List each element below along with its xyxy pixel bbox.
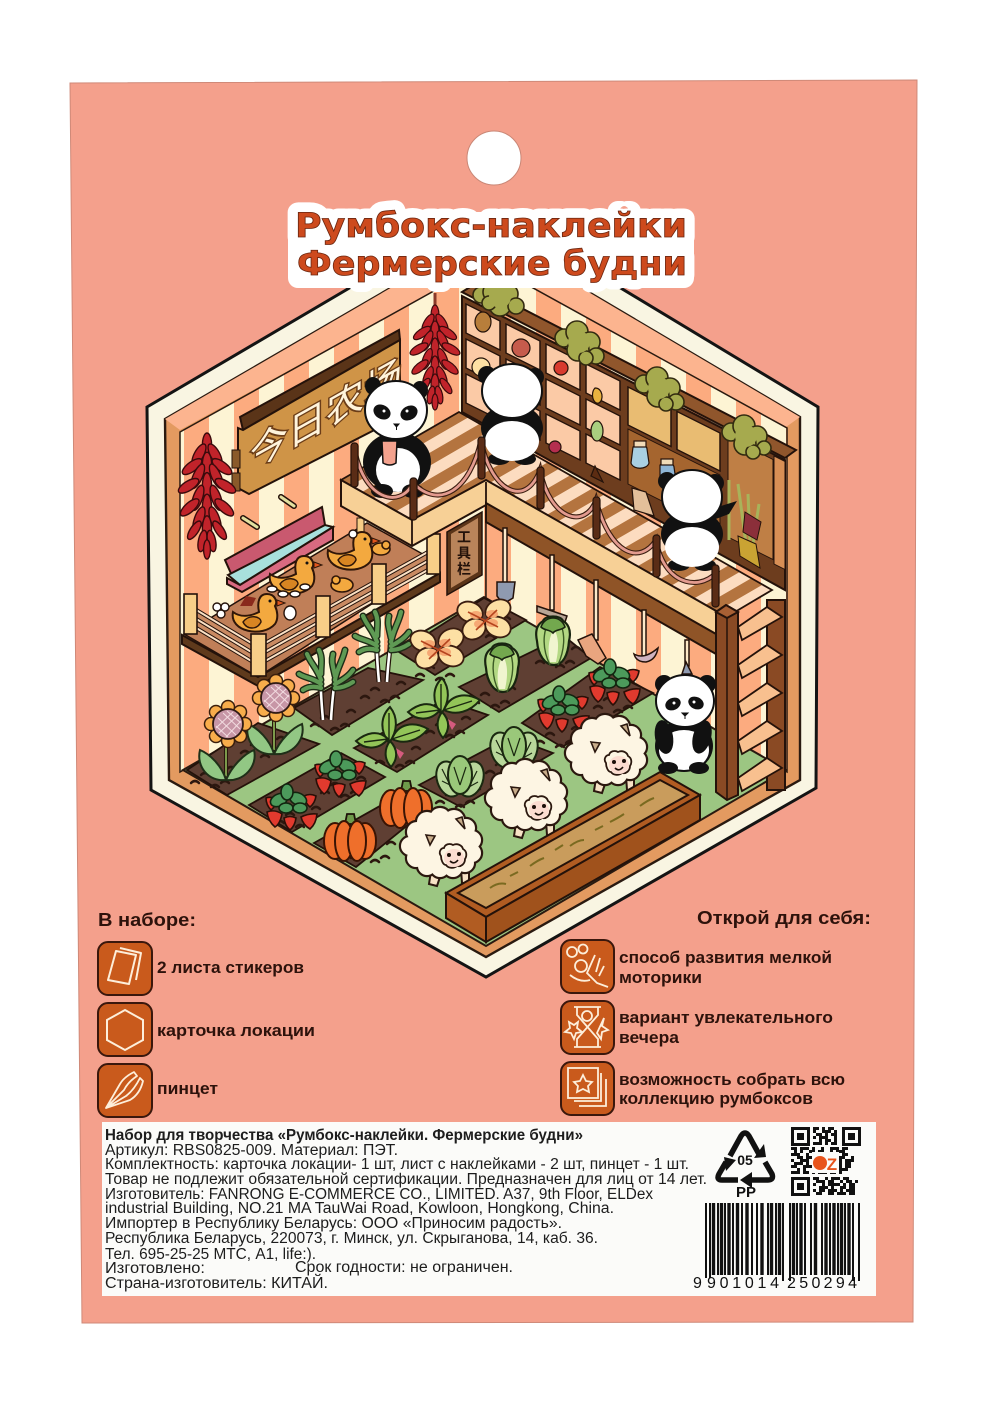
plants: flat flowers bbox=[407, 595, 514, 673]
barcode digits: 250294 bbox=[787, 1275, 857, 1292]
hen 1 bbox=[270, 556, 322, 594]
icon: sticker sheets bbox=[98, 942, 152, 995]
text: fine motor skills: способ развития мелкой bbox=[619, 949, 832, 967]
plants: sunflowers bbox=[199, 674, 303, 780]
text: tweezers: пинцет bbox=[157, 1080, 218, 1098]
floor bbox=[183, 597, 786, 946]
plants: lettuce bbox=[432, 727, 542, 800]
right wall bbox=[486, 262, 787, 772]
label text: Товар не подлежит обязательной сертификации. Предназначен для лиц от 14 лет. bbox=[105, 1171, 707, 1188]
barcode digits: 9 bbox=[693, 1275, 702, 1292]
heading: discover: Открой для себя: bbox=[697, 908, 871, 928]
label text: industrial Building, NO.21 MA TauWai Road, Kowloon, Hongkong, China. bbox=[105, 1200, 614, 1217]
panel: product label bbox=[102, 1122, 876, 1296]
label text: Изготовлено: bbox=[105, 1260, 205, 1277]
plants: leeks bbox=[299, 612, 409, 720]
chili string bbox=[434, 293, 436, 315]
label text: Страна-изготовитель: КИТАЙ. bbox=[105, 1274, 328, 1292]
text: fine motor skills: моторики bbox=[619, 969, 702, 987]
title bbox=[288, 206, 694, 288]
tool signboard: 具 bbox=[457, 545, 471, 561]
icon: tweezers bbox=[98, 1064, 152, 1117]
plants: pumpkins bbox=[324, 781, 432, 861]
icon: recycling 05 PP: 05 bbox=[737, 1152, 753, 1168]
QR code: Z bbox=[827, 1155, 837, 1174]
hen 3 with comb bbox=[233, 594, 285, 632]
panel: in the set bbox=[98, 910, 315, 1117]
soil texture bbox=[191, 617, 638, 862]
chili bunch left bbox=[176, 433, 238, 559]
dried plants bbox=[729, 480, 761, 568]
hanging tools bbox=[497, 528, 692, 674]
barcode digits: 901014 bbox=[707, 1275, 779, 1292]
text: collection: возможность собрать всю bbox=[619, 1071, 845, 1089]
label text: Набор для творчества «Румбокс-наклейки. Фермерские будни» bbox=[105, 1127, 583, 1144]
text: exciting evening bbox=[619, 1009, 833, 1047]
chili bunch right bbox=[408, 305, 462, 410]
feeder bbox=[225, 507, 333, 592]
ladder bbox=[738, 600, 785, 791]
panel: isometric farm room bbox=[147, 232, 818, 977]
label text bbox=[105, 1127, 707, 1292]
label text: Республика Беларусь, 220073, г. Минск, ул. Скрыганова, 14, каб. 36. bbox=[105, 1230, 598, 1247]
sign: farm board bbox=[232, 330, 402, 494]
icon: recycling 05 PP: PP bbox=[736, 1184, 756, 1201]
text: exciting evening: вариант увлекательного bbox=[619, 1009, 833, 1027]
vegetable beds bbox=[187, 598, 653, 867]
sign: farm board: 今日农场 bbox=[250, 350, 402, 478]
title: Фермерские будни bbox=[297, 244, 687, 284]
wooden post bbox=[716, 605, 738, 800]
moss bush 4 bbox=[722, 415, 771, 459]
plants: beet bbox=[356, 678, 480, 767]
chicks bbox=[331, 541, 390, 592]
moss bush 1 bbox=[473, 282, 524, 316]
text: collection: коллекцию румбоксов bbox=[619, 1090, 813, 1108]
plants: strawberries front bbox=[266, 751, 366, 830]
hen 2 bbox=[328, 532, 380, 570]
wall tools handles bbox=[243, 497, 294, 527]
panda back shelf left bbox=[478, 364, 544, 465]
text: exciting evening: вечера bbox=[619, 1029, 680, 1047]
shelf contents bbox=[472, 312, 676, 516]
plants: strawberries back bbox=[538, 659, 640, 732]
panel: discover bbox=[561, 908, 871, 1115]
text: location card: карточка локации bbox=[157, 1022, 315, 1040]
label text: Импортер в Республику Беларусь: ООО «Приносим радость». bbox=[105, 1215, 562, 1232]
icon: gears and hand bbox=[561, 940, 614, 993]
heading: in the set: В наборе: bbox=[98, 910, 196, 930]
hay trough bbox=[446, 772, 700, 942]
moss bush 2 bbox=[555, 321, 604, 365]
wall tools bbox=[243, 497, 294, 527]
tool signboard bbox=[447, 512, 482, 595]
eggs bbox=[213, 530, 357, 620]
barcode bbox=[693, 1203, 859, 1292]
panda front standing bbox=[652, 675, 716, 774]
panda back shelf right bbox=[658, 470, 737, 571]
title: Фермерские будни bbox=[297, 244, 687, 284]
coop platform bbox=[182, 518, 440, 686]
fence bbox=[184, 534, 440, 676]
shelf unit bbox=[462, 284, 796, 590]
label text: Тел. 695-25-25 МТС, A1, life:). bbox=[105, 1246, 316, 1263]
hexagon frame bbox=[147, 232, 818, 977]
icon: location card bbox=[98, 1003, 152, 1056]
icon: hourglass bbox=[561, 1001, 614, 1054]
label text: Изготовитель: FANRONG E-COMMERCE CO., LIMITED. A37, 9th Floor, ELDex bbox=[105, 1186, 653, 1203]
text: 2 sheets: 2 листа стикеров bbox=[157, 959, 304, 977]
QR code bbox=[791, 1128, 860, 1194]
label text: Комплектность: карточка локации- 1 шт, лист с наклейками - 2 шт, пинцет - 1 шт. bbox=[105, 1156, 689, 1173]
barcode digits bbox=[693, 1275, 857, 1292]
left wall bbox=[180, 262, 486, 772]
title: Румбокс-наклейки bbox=[295, 206, 687, 246]
label text: Артикул: RBS0825-009. Материал: ПЭТ. bbox=[105, 1142, 398, 1159]
title: Румбокс-наклейки bbox=[295, 206, 687, 246]
tool beam bbox=[486, 503, 716, 654]
moss bush 3 bbox=[635, 367, 684, 411]
icon: recycling 05 PP bbox=[718, 1133, 772, 1201]
text: collection bbox=[619, 1071, 845, 1108]
icon: card collection bbox=[561, 1062, 614, 1115]
sheep bbox=[401, 715, 646, 886]
plants: napa cabbage bbox=[485, 616, 570, 692]
text: fine motor skills bbox=[619, 949, 832, 987]
tool signboard: 栏 bbox=[457, 561, 471, 577]
hanging hole bbox=[467, 131, 521, 185]
background card bbox=[70, 80, 917, 1323]
panda with cup bbox=[363, 377, 431, 498]
mezzanine deck bbox=[341, 412, 772, 640]
rope barrier bbox=[351, 437, 719, 607]
tool signboard: 工 bbox=[457, 529, 471, 545]
label text: Срок годности: не ограничен. bbox=[295, 1259, 513, 1276]
